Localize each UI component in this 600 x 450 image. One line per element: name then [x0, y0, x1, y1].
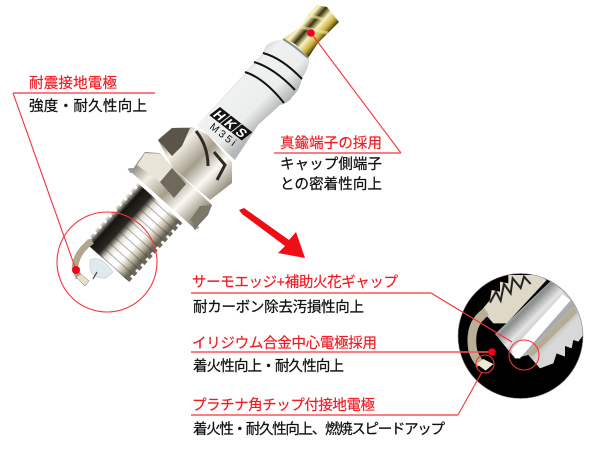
detail center electrode: [512, 352, 520, 359]
ground electrode: [75, 241, 92, 286]
marker dot: [488, 348, 496, 356]
heading: プラチナ角チップ付接地電極: [192, 397, 376, 414]
leader line: [458, 372, 482, 415]
heading: 耐震接地電極: [29, 75, 118, 92]
HKS M35i logo: M35i: [207, 121, 238, 149]
plug insulator: [197, 39, 309, 160]
detail shell: [495, 280, 583, 368]
HKS M35i logo: S: [232, 125, 251, 140]
detail circle: [476, 355, 494, 373]
upper hex nut: [158, 127, 232, 200]
heading: 真鍮端子の採用: [280, 134, 382, 152]
detail lens edge: [458, 274, 583, 398]
callout: platinum tip ground electrode: [191, 355, 494, 438]
leader line: [431, 293, 512, 342]
description: 強度・耐久性向上: [29, 98, 147, 115]
zoom circle on plug tip: [57, 212, 157, 312]
detail ground electrode: [472, 312, 487, 364]
spark plug illustration: [75, 5, 339, 286]
underline: [191, 414, 458, 416]
arrow: [239, 208, 305, 258]
leader line: [311, 33, 401, 153]
marker dot: [307, 29, 315, 37]
detail circle: [509, 340, 539, 370]
underline: [13, 92, 155, 94]
HKS M35i logo: H: [210, 108, 229, 123]
leader line: [13, 93, 76, 270]
underline: [274, 152, 401, 154]
callout: iridium center electrode: [191, 335, 496, 375]
description: [280, 156, 382, 193]
lower hex nut: [131, 152, 212, 229]
detail threads: [482, 275, 547, 323]
ceramic nose: [90, 258, 113, 279]
heading: サーモエッジ+補助火花ギャップ: [192, 274, 398, 291]
HKS M35i logo: K: [221, 117, 240, 132]
description: との密着性向上: [280, 176, 382, 193]
heading: イリジウム合金中心電極採用: [192, 335, 377, 352]
detail lens: [458, 274, 583, 398]
washer: [129, 170, 197, 229]
description: 耐カーボン除去汚損性向上: [193, 299, 364, 316]
underline: [191, 292, 431, 294]
marker dot: [72, 266, 80, 274]
underline: [191, 351, 492, 353]
description: キャップ側端子: [280, 156, 382, 173]
description: 着火性向上・耐久性向上: [193, 358, 344, 375]
plug terminal: [283, 5, 339, 58]
description: 着火性・耐久性向上、燃焼スピードアップ: [193, 420, 446, 438]
callout: thermo edge: [191, 274, 539, 370]
callout: ground electrode durability: [13, 75, 157, 312]
threaded shell: [107, 203, 160, 262]
callout: brass terminal: [274, 29, 401, 193]
HKS M35i logo: [207, 105, 253, 149]
